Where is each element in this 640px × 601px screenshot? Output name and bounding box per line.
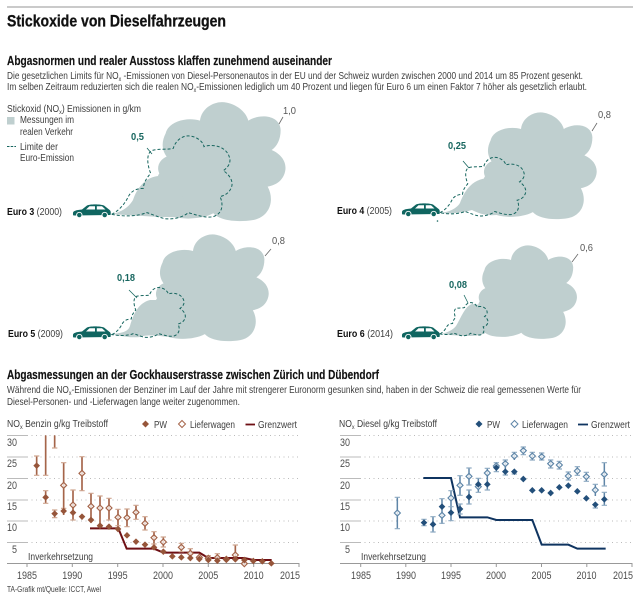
- x axis Diesel: 2005: [532, 570, 552, 582]
- chart: Benzin: [7, 419, 300, 582]
- panel: Euro 3: [7, 102, 296, 221]
- value: limit 0,25: 0,25: [448, 140, 466, 152]
- limit cloud Euro 6: [440, 303, 488, 336]
- x axis Diesel: 2010: [576, 570, 596, 582]
- limit line Diesel: [423, 478, 606, 549]
- legend: clouds: Euro-Emission: [20, 153, 74, 164]
- value: limit 0,18: 0,18: [117, 272, 135, 284]
- x axis Benzin: 1990: [62, 570, 82, 582]
- legend: clouds: Messungen im: [20, 115, 74, 126]
- y axis Diesel: 30: [340, 437, 350, 449]
- x axis Benzin: 2015: [280, 570, 300, 582]
- value: limit 0,5: 0,5: [131, 131, 144, 143]
- limit cloud Euro 3: [112, 136, 232, 219]
- label Euro 5: Euro 5 (2009): [8, 329, 63, 340]
- annotation Inverkehrsetzung: Inverkehrsetzung: [28, 552, 93, 563]
- x axis Diesel: 2000: [486, 570, 506, 582]
- value: real 0,8: [265, 235, 285, 256]
- y axis Benzin: 30: [7, 437, 17, 449]
- measured cloud Euro 5: [112, 234, 269, 341]
- legend: clouds: ) Emissionen in g/km: [62, 104, 141, 115]
- markers PW Benzin: [33, 462, 275, 567]
- source credit: TA-Grafik mt/Quelle: ICCT, Awel: [7, 585, 101, 594]
- y axis Diesel: 20: [340, 480, 350, 492]
- value: limit 0,18: [117, 272, 137, 298]
- limit line Benzin: [90, 528, 272, 560]
- legend Diesel: Grenzwert: [591, 420, 630, 431]
- intro text: Abgasnormen: x: [119, 76, 122, 83]
- intro text: Abgasmessungen: [7, 385, 581, 408]
- annotation Inverkehrsetzung: Inverkehrsetzung: [361, 552, 426, 563]
- legend Diesel: Lieferwagen: [522, 420, 568, 431]
- legend: clouds: x: [59, 109, 62, 116]
- intro text: Abgasnormen: Im selben Zeitraum reduzierten sich die realen NO: [7, 82, 237, 93]
- panel: Euro 5: [8, 234, 285, 341]
- error bars Benzin: [34, 435, 271, 565]
- x axis Diesel: 1985: [351, 570, 371, 582]
- x axis Benzin: [7, 564, 300, 582]
- legend: clouds: Limite der: [20, 142, 58, 153]
- value: limit 0,5: [131, 131, 152, 154]
- heading: Abgasmessungen: Abgasmessungen an der Gockhauserstrasse zwischen Zürich und Dübendorf: [7, 367, 380, 382]
- y axis Benzin: 15: [7, 501, 17, 513]
- value: real 0,8: 0,8: [272, 235, 285, 247]
- value: real 1,0: [279, 105, 296, 124]
- value: real 0,6: [572, 242, 593, 262]
- intro text: Abgasnormen: [7, 71, 587, 94]
- value: limit 0,25: [448, 140, 469, 168]
- x axis Benzin: 1985: [17, 570, 37, 582]
- legend Benzin: Grenzwert: [258, 420, 297, 431]
- measured cloud Euro 3: [112, 102, 286, 221]
- legend: clouds: [7, 104, 141, 164]
- y axis Benzin: 20: [7, 480, 17, 492]
- legend Benzin: PW: [154, 420, 167, 431]
- x axis Diesel: 1995: [441, 570, 461, 582]
- intro text: Abgasmessungen: x: [69, 390, 72, 397]
- y axis Benzin: 25: [7, 458, 17, 470]
- x axis Benzin: 2010: [244, 570, 264, 582]
- panel: Euro 6: [337, 242, 593, 340]
- chart title Benzin: x: [20, 424, 23, 431]
- panel: Euro 4: [337, 109, 611, 222]
- y axis Benzin: [7, 437, 17, 556]
- chart title Benzin: Benzin g/kg Treibstoff: [23, 419, 108, 430]
- value: real 0,8: 0,8: [598, 109, 611, 121]
- label Euro 3: Euro 3 (2000): [7, 207, 62, 218]
- icon: car Euro 3: [73, 204, 111, 218]
- x axis Benzin: 1995: [108, 570, 128, 582]
- legend Diesel: PW: [487, 420, 500, 431]
- value: real 0,8: [592, 109, 611, 131]
- heading: Abgasnormen: Abgasnormen und realer Ausstoss klaffen zunehmend auseinander: [7, 53, 332, 68]
- x axis Benzin: 2005: [198, 570, 218, 582]
- label Euro 4: Euro 4 (2005): [337, 206, 392, 217]
- value: limit 0,08: [449, 279, 468, 303]
- title: Stickoxide von Dieselfahrzeugen: [7, 12, 226, 30]
- icon: car Euro 6: [402, 326, 440, 340]
- intro text: Abgasnormen: x: [194, 87, 197, 94]
- intro text: Abgasmessungen: Diesel-Personen- und -Lieferwagen lange weiter zugenommen.: [7, 397, 240, 408]
- x axis Diesel: [340, 564, 633, 582]
- legend Benzin: [142, 420, 297, 431]
- y axis Diesel: 25: [340, 458, 350, 470]
- y axis Diesel: 5: [345, 544, 350, 556]
- measured cloud Euro 4: [440, 112, 597, 219]
- legend: clouds: realen Verkehr: [20, 127, 73, 138]
- value: real 0,6: 0,6: [580, 242, 593, 254]
- value: real 1,0: 1,0: [283, 105, 296, 117]
- icon: car Euro 5: [73, 326, 111, 340]
- intro text: Abgasnormen: Die gesetzlichen Limits für NO: [7, 71, 146, 82]
- data Benzin: [33, 435, 275, 567]
- error bars Diesel: [395, 447, 607, 532]
- y axis Diesel: 15: [340, 501, 350, 513]
- data Diesel: [394, 447, 608, 549]
- legend Diesel: [476, 420, 630, 431]
- x axis Diesel: 2015: [613, 570, 633, 582]
- chart title Benzin: NO: [7, 419, 22, 430]
- y axis Diesel: 10: [340, 522, 350, 534]
- markers Lieferwagen Diesel: [394, 448, 607, 518]
- chart: Diesel: [339, 419, 633, 582]
- y axis Diesel: [340, 437, 350, 556]
- limit cloud Euro 5: [112, 288, 185, 337]
- measured cloud Euro 6: [442, 245, 577, 339]
- markers PW Diesel: [421, 464, 608, 528]
- intro text: Abgasmessungen: Während die NO: [7, 385, 84, 396]
- markers Lieferwagen Benzin: [61, 470, 247, 567]
- legend: clouds: Stickoxid (NO: [7, 104, 70, 115]
- value: limit 0,08: 0,08: [449, 279, 467, 291]
- icon: car Euro 4: [402, 203, 440, 217]
- y axis Benzin: 5: [12, 544, 17, 556]
- x axis Benzin: 2000: [153, 570, 173, 582]
- limit cloud Euro 4: [440, 157, 526, 216]
- legend Benzin: Lieferwagen: [190, 420, 235, 431]
- label Euro 6: Euro 6 (2014): [337, 329, 393, 340]
- chart title Diesel: Diesel g/kg Treibstoff: [355, 419, 437, 430]
- y axis Benzin: 10: [7, 522, 17, 534]
- chart title Diesel: x: [352, 424, 355, 431]
- chart title Diesel: NO: [339, 419, 354, 430]
- x axis Diesel: 1990: [396, 570, 416, 582]
